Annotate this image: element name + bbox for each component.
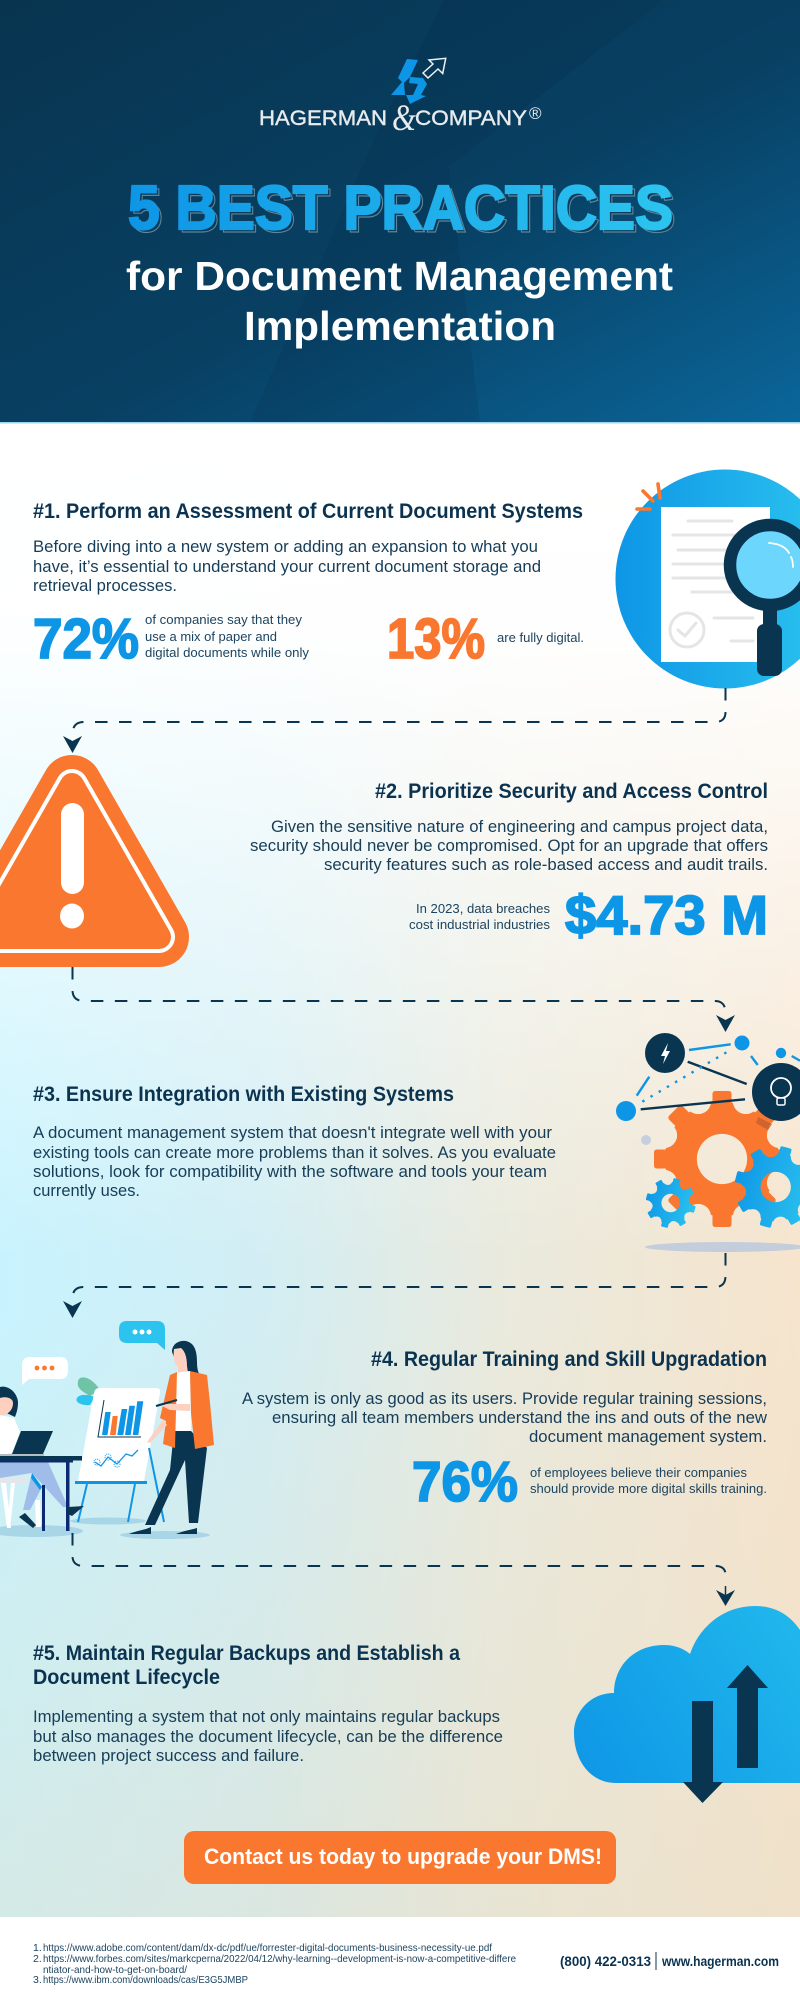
references: https://www.forbes.com/sites/markcperna/2022/04/12/why-learning--development-is-now-a-competitive-differe (43, 1953, 516, 1965)
body text 3: solutions, look for compatibility with the software and tools your team (33, 1163, 547, 1181)
logo wordmark: & (392, 98, 416, 139)
section 3: integration (33, 1083, 556, 1200)
stat 72% caption: digital documents while only (145, 645, 309, 660)
stat 13% caption: are fully digital. (497, 630, 584, 645)
illustration: training scene (0, 1321, 214, 1539)
body text 4: A system is only as good as its users. Provide regular training sessions, (242, 1390, 767, 1408)
header panel (0, 0, 800, 424)
stat 13%: 13% (387, 607, 485, 671)
body text 5 (33, 1708, 503, 1765)
icon: logo mark (391, 58, 446, 104)
subtitle: Implementation (244, 303, 556, 349)
body text 1: retrieval processes. (33, 577, 177, 595)
body text 5: but also manages the document lifecycle, can be the difference (33, 1728, 503, 1746)
call to action button: Contact us today to upgrade your DMS! (204, 1844, 602, 1869)
body text 2: Given the sensitive nature of engineering and campus project data, (271, 818, 768, 836)
icon: document and magnifier (616, 470, 800, 688)
heading 5 (33, 1642, 460, 1689)
logo wordmark (259, 98, 542, 139)
presenter woman (129, 1341, 214, 1534)
references: 1. (33, 1942, 42, 1954)
stat $4.73 M: $4.73 M (565, 884, 768, 946)
logo (259, 58, 542, 139)
speech bubble blue (119, 1321, 165, 1350)
heading 4: #4. Regular Training and Skill Upgradation (371, 1348, 767, 1371)
references: 2. (33, 1953, 42, 1965)
logo wordmark: HAGERMAN (259, 106, 387, 130)
stat 72% caption (145, 612, 309, 660)
body text 1: Before diving into a new system or adding an expansion to what you (33, 538, 538, 556)
icon: gears and network (616, 1033, 800, 1252)
stat 76%: 76% (412, 1450, 518, 1514)
section 1: assessment (33, 500, 584, 671)
stat 72% caption: of companies say that they (145, 612, 302, 627)
flip chart (75, 1388, 164, 1522)
icon: warning triangle (0, 785, 159, 937)
stat caption: cost industrial industries (409, 917, 551, 932)
heading 2: #2. Prioritize Security and Access Control (375, 780, 768, 803)
arrow: connector 2 to 3 (72, 967, 735, 1032)
references: https://www.adobe.com/content/dam/dx-dc/pdf/ue/forrester-digital-documents-business-necessity-ue.pdf (43, 1942, 492, 1954)
arrow: connector 3 to 4 (63, 1253, 726, 1318)
call to action button (184, 1831, 616, 1884)
body text 2: security features such as role-based access and audit trails. (324, 856, 768, 874)
body text 3 (33, 1124, 556, 1200)
body text 4 (242, 1390, 767, 1446)
references: ntiator-and-how-to-get-on-board/ (43, 1964, 187, 1976)
speech bubble white (22, 1357, 68, 1385)
section 4: training (242, 1348, 767, 1514)
body text 1 (33, 538, 541, 595)
contact details: www.hagerman.com (661, 1953, 779, 1969)
logo wordmark: COMPANY (415, 106, 527, 130)
icon: cloud with arrows (574, 1606, 800, 1803)
stat caption: In 2023, data breaches (416, 901, 550, 916)
section 5: backups (33, 1642, 503, 1765)
body text 3: existing tools can create more problems than it solves. As you evaluate (33, 1144, 556, 1162)
subtitle (126, 253, 673, 349)
heading 3: #3. Ensure Integration with Existing Systems (33, 1083, 454, 1106)
heading 1: #1. Perform an Assessment of Current Document Systems (33, 500, 583, 523)
arrow: connector 1 to 2 (63, 688, 726, 753)
body text 3: A document management system that doesn't integrate well with your (33, 1124, 553, 1142)
stat 72%: 72% (33, 607, 139, 671)
body text 2: security should never be compromised. Opt for an upgrade that offers (250, 837, 768, 855)
references (33, 1942, 516, 1986)
background gradient (0, 423, 800, 1917)
stat caption (409, 901, 551, 932)
stat 72% caption: use a mix of paper and (145, 629, 277, 644)
footer (0, 1917, 800, 2000)
heading 5: Document Lifecycle (33, 1666, 220, 1689)
body text 5: between project success and failure. (33, 1747, 304, 1765)
arrow: connector 4 to 5 (72, 1533, 735, 1606)
title: 5 BEST PRACTICES (128, 174, 673, 243)
contact details (560, 1952, 779, 1970)
body text 5: Implementing a system that not only maintains regular backups (33, 1708, 500, 1726)
seated person with laptop (0, 1387, 84, 1531)
contact details: (800) 422-0313 (560, 1953, 651, 1969)
section 2: security (250, 780, 768, 946)
body text 3: currently uses. (33, 1182, 140, 1200)
heading 5: #5. Maintain Regular Backups and Establish a (33, 1642, 460, 1665)
plant leaves (76, 1377, 100, 1405)
references: https://www.ibm.com/downloads/cas/E3G5JMBP (43, 1974, 248, 1986)
body text 1: have, it’s essential to understand your current document storage and (33, 558, 541, 576)
body text 2 (250, 818, 768, 874)
stat 76% caption: of employees believe their companies (530, 1465, 747, 1480)
title: 5 BEST PRACTICES (131, 177, 676, 246)
body text 4: ensuring all team members understand the ins and outs of the new (272, 1409, 767, 1427)
stat 76% caption: should provide more digital skills training. (530, 1481, 767, 1496)
references: 3. (33, 1974, 42, 1986)
logo wordmark: ® (529, 104, 542, 123)
subtitle: for Document Management (126, 253, 673, 299)
body text 4: document management system. (529, 1428, 767, 1446)
stat 76% caption (530, 1465, 767, 1496)
